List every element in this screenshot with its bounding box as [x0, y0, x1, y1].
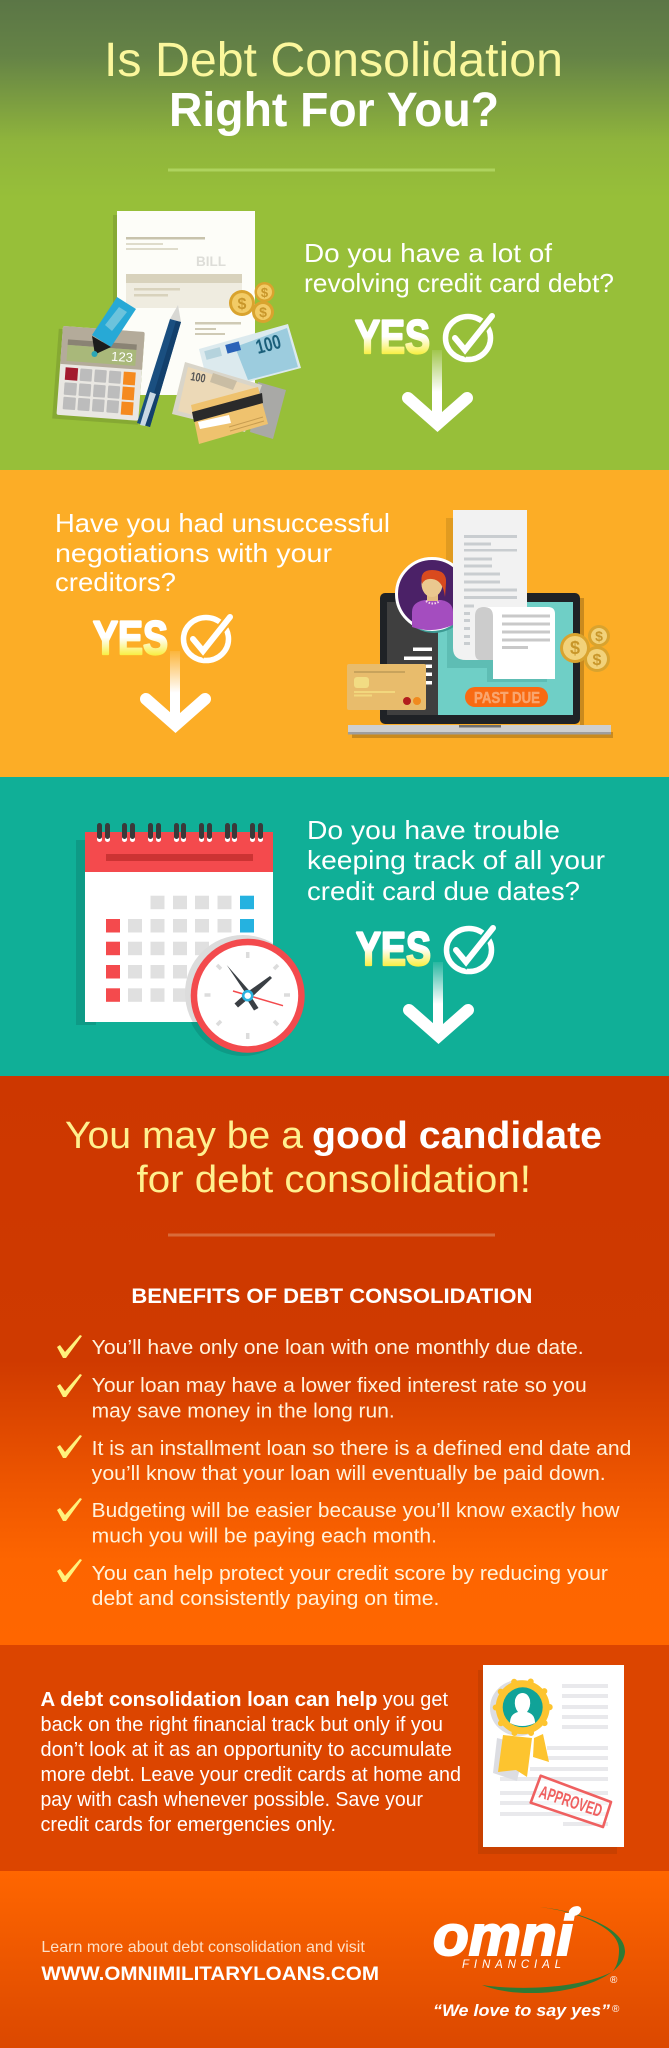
panel: benefits	[0, 1076, 669, 1645]
title	[104, 34, 563, 137]
illustration: approved certificate	[478, 1665, 624, 1854]
calendar rings	[97, 823, 263, 842]
icon: calculator: 123	[111, 349, 133, 365]
icon: ribbon badge	[490, 1680, 550, 1781]
paragraph: back on the right financial track but only if you	[40, 1714, 443, 1736]
icon: coins: $	[593, 652, 602, 669]
icon: pen	[137, 305, 181, 427]
logo: omni financial: omni	[433, 1904, 574, 1968]
icon: coins: $	[595, 628, 603, 644]
yes with check and arrow: YES	[356, 922, 431, 975]
title: Right For You?	[169, 84, 499, 137]
heading: good candidate: good candidate	[312, 1115, 602, 1157]
heading: good candidate: You may be a	[65, 1115, 304, 1157]
icon: credit card	[191, 387, 268, 444]
title: Is Debt Consolidation	[104, 34, 563, 87]
benefit 2	[57, 1374, 587, 1422]
illustration: bill, calculator, pen, money	[52, 211, 301, 444]
tagline: ®	[612, 2004, 620, 2015]
icon: coins	[229, 282, 274, 323]
paragraph: you get	[383, 1689, 448, 1711]
stamp: approved: APPROVED	[537, 1782, 605, 1821]
illustration: bill, calculator, pen, money: BILL	[196, 253, 226, 269]
benefit 4	[57, 1498, 620, 1548]
benefit 2: Your loan may have a lower fixed interest rate so you	[92, 1375, 587, 1397]
stamp: approved	[531, 1776, 611, 1827]
benefit 1: You’ll have only one loan with one monthly due date.	[92, 1337, 584, 1359]
call to action: WWW.OMNIMILITARYLOANS.COM	[41, 1964, 379, 1985]
benefit 5: You can help protect your credit score by reducing your	[92, 1563, 608, 1585]
benefit 5: debt and consistently paying on time.	[92, 1588, 439, 1610]
question 2	[55, 508, 390, 597]
panel: question 3	[0, 777, 669, 1076]
icon: tan banknote: 100	[189, 369, 207, 386]
question 3: Do you have trouble	[307, 815, 560, 845]
logo: omni financial: ®	[610, 1975, 618, 1986]
question 2: negotiations with your	[55, 538, 332, 568]
call to action	[41, 1939, 379, 1985]
benefit 4: Budgeting will be easier because you’ll know exactly how	[92, 1500, 620, 1522]
benefit 3	[57, 1435, 631, 1485]
question 1: Do you have a lot of	[304, 238, 553, 268]
illustration: calendar and clock	[76, 823, 305, 1056]
paragraph: pay with cash whenever possible. Save your	[40, 1789, 423, 1811]
icon: person avatar	[396, 558, 470, 633]
yes with check and arrow	[355, 310, 492, 426]
paragraph: credit cards for emergencies only.	[40, 1814, 336, 1836]
question 3	[307, 815, 605, 906]
icon: receipt	[453, 510, 555, 679]
question 2: Have you had unsuccessful	[55, 508, 390, 538]
icon: blue banknote	[199, 324, 301, 392]
calendar grid	[106, 896, 254, 1002]
heading: good candidate	[65, 1115, 602, 1201]
logo: omni financial: FINANCIAL	[462, 1959, 561, 1971]
question 3: keeping track of all your	[307, 845, 605, 875]
benefit 2: may save money in the long run.	[92, 1400, 395, 1422]
icon: tan banknote	[172, 362, 286, 439]
logo: omni financial	[433, 1904, 625, 1993]
icon: clock	[191, 939, 305, 1053]
icon: blue banknote: 100	[254, 331, 283, 359]
yes with check and arrow	[93, 611, 230, 727]
icon: coins: $	[261, 285, 269, 300]
heading: good candidate: for debt consolidation!	[136, 1159, 531, 1201]
benefit 3: you’ll know that your loan will eventually be paid down.	[92, 1463, 606, 1485]
panel: footer	[0, 1871, 669, 2048]
icon: coins: $	[259, 304, 267, 320]
icon: gold card	[347, 664, 426, 710]
panel: loan advice	[0, 1645, 669, 1871]
benefit 3: It is an installment loan so there is a defined end date and	[92, 1438, 631, 1460]
past due badge: PAST DUE	[474, 690, 540, 707]
icon: coins: $	[238, 296, 247, 313]
call to action: Learn more about debt consolidation and visit	[41, 1939, 365, 1956]
paragraph: don’t look at it as an opportunity to accumulate	[40, 1739, 452, 1761]
benefit 5	[57, 1559, 608, 1610]
paragraph: A debt consolidation loan can help	[40, 1689, 378, 1711]
illustration: laptop with past due bill	[347, 510, 613, 738]
icon: highlighter	[92, 297, 136, 357]
yes with check and arrow	[356, 922, 493, 1038]
heading: benefits: BENEFITS OF DEBT CONSOLIDATION	[131, 1285, 532, 1308]
benefit 4: much you will be paying each month.	[92, 1526, 437, 1548]
icon: coins	[560, 625, 610, 672]
yes with check and arrow: YES	[355, 310, 430, 363]
tagline: “We love to say yes”	[433, 2001, 611, 2020]
yes with check and arrow: YES	[93, 611, 168, 664]
panel: question 2	[0, 470, 669, 777]
question 1: revolving credit card debt?	[304, 268, 614, 298]
paragraph	[40, 1689, 461, 1836]
question 1	[304, 238, 614, 298]
paragraph: more debt. Leave your credit cards at home and	[40, 1764, 461, 1786]
icon: calculator	[52, 326, 145, 425]
panel: title and question 1	[0, 0, 669, 470]
question 2: creditors?	[55, 567, 176, 597]
icon: coins: $	[570, 638, 580, 658]
question 3: credit card due dates?	[307, 876, 580, 906]
